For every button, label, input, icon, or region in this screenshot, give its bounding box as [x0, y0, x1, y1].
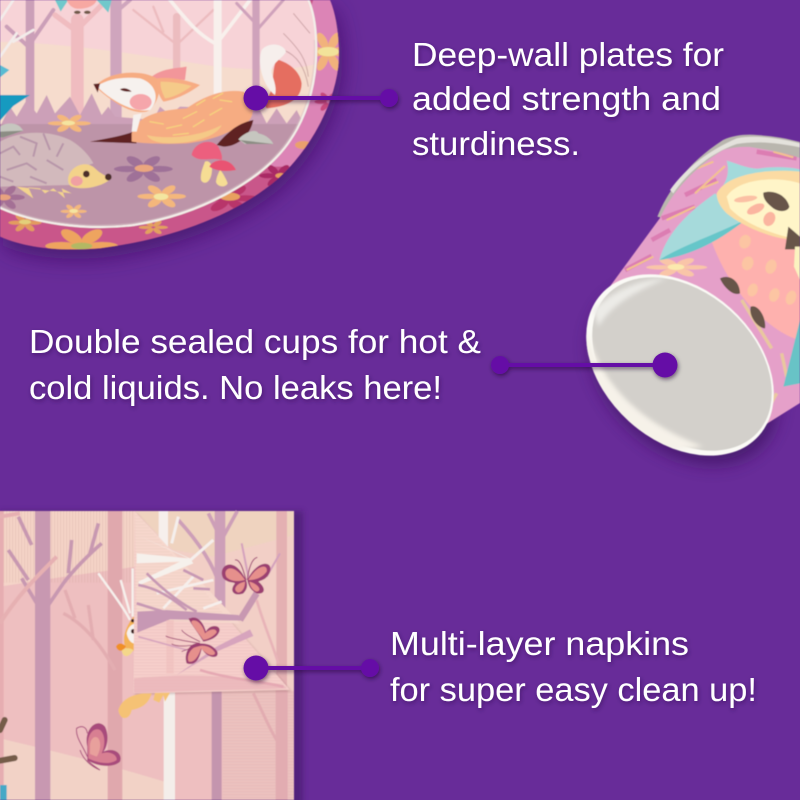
napkin fold: [133, 512, 290, 693]
napkin trees: [0, 511, 217, 800]
text: plate: sturdiness.: [412, 125, 580, 162]
plate: [0, 0, 348, 265]
owl body: [710, 220, 800, 340]
text: plate: added strength and: [412, 80, 721, 117]
text: plate: Deep-wall plates for: [412, 36, 724, 73]
text: napkins: Multi-layer napkins: [390, 625, 689, 662]
owl feet: [720, 277, 765, 328]
plate rim shadow: [283, 13, 310, 87]
text: cups: cold liquids. No leaks here!: [29, 369, 442, 406]
teal corner: [0, 785, 7, 800]
sky: [0, 0, 315, 70]
rocks: [0, 124, 273, 144]
connector: napkins: [244, 656, 379, 680]
napkin bottom band: [0, 738, 170, 800]
bird under fold: [116, 613, 170, 718]
plate wall ring: [0, 0, 315, 226]
cup end: [585, 274, 774, 456]
owl spots: [737, 233, 798, 306]
text: plate: [412, 36, 724, 162]
napkin upper right area: [135, 511, 294, 691]
grass: [1, 94, 301, 124]
butterfly on fold: [166, 617, 220, 664]
teal leaf: [0, 95, 30, 121]
owl wing: [659, 193, 745, 260]
text: napkins: [390, 625, 757, 708]
napkin base: [0, 511, 294, 800]
owl feet on plate: [55, 0, 112, 14]
branch stub: [0, 720, 15, 761]
callout: napkins: [244, 625, 757, 708]
cup body: [610, 146, 800, 424]
rim flowers: [8, 31, 348, 265]
napkin top band: [0, 511, 137, 587]
fox tail: [263, 59, 302, 108]
hedgehog: [0, 133, 112, 198]
butterfly upper right: [222, 557, 270, 594]
plate ring shading: [0, 40, 315, 226]
napkin: [0, 511, 294, 800]
connector: cups: [491, 352, 678, 378]
text: napkins: for super easy clean up!: [390, 671, 757, 708]
fox: [90, 45, 302, 147]
plate scene: [0, 0, 320, 240]
cup: [585, 134, 800, 456]
plate rim: [0, 0, 348, 265]
napkin right panel: [223, 690, 294, 800]
callout: cups: [29, 323, 678, 406]
text: cups: [29, 323, 481, 406]
cup rim behind: [657, 135, 800, 220]
fold branches: [137, 535, 193, 585]
distant hill: [0, 42, 320, 127]
owl head: [717, 171, 800, 240]
ground flowers: [0, 114, 186, 219]
cup flowers: [625, 142, 797, 423]
mushrooms: [192, 142, 236, 186]
connector: plate: [244, 86, 398, 110]
butterfly lower left: [76, 723, 121, 770]
callout: plate: [244, 36, 724, 162]
ground: [0, 124, 297, 226]
trees: [0, 0, 283, 127]
owl eye: [763, 192, 789, 211]
text: cups: Double sealed cups for hot &: [29, 323, 481, 360]
fold edge shadow: [135, 513, 291, 695]
